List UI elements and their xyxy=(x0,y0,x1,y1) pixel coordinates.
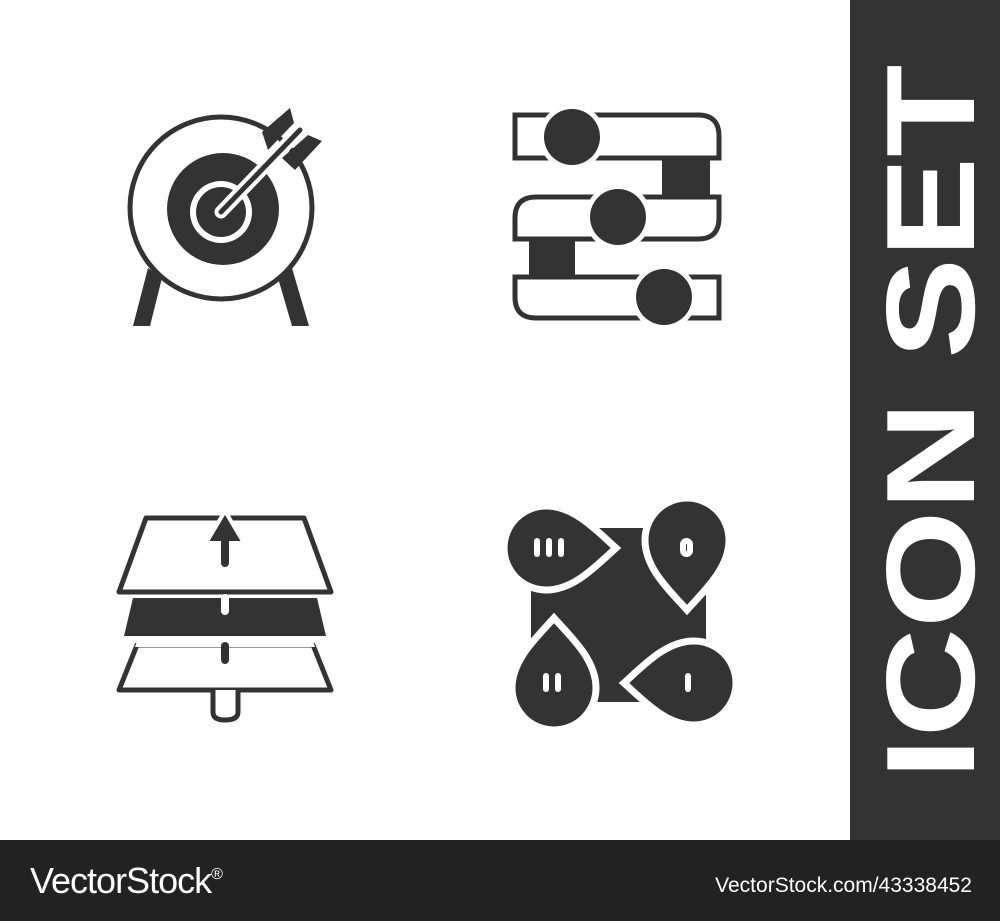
icon: layers with arrow xyxy=(119,511,331,720)
footer bar: VectorStock xyxy=(30,860,211,901)
footer bar: VectorStock.com/43338452 xyxy=(715,874,972,897)
icon: sliders xyxy=(515,106,719,328)
side panel: ICON SET xyxy=(850,0,1000,840)
icon: archery target xyxy=(130,108,322,326)
footer bar: ® xyxy=(211,866,223,883)
footer bar xyxy=(0,840,1000,921)
icon: location pins square xyxy=(504,498,736,730)
side panel: ICON SET: ICON SET xyxy=(860,64,1000,780)
